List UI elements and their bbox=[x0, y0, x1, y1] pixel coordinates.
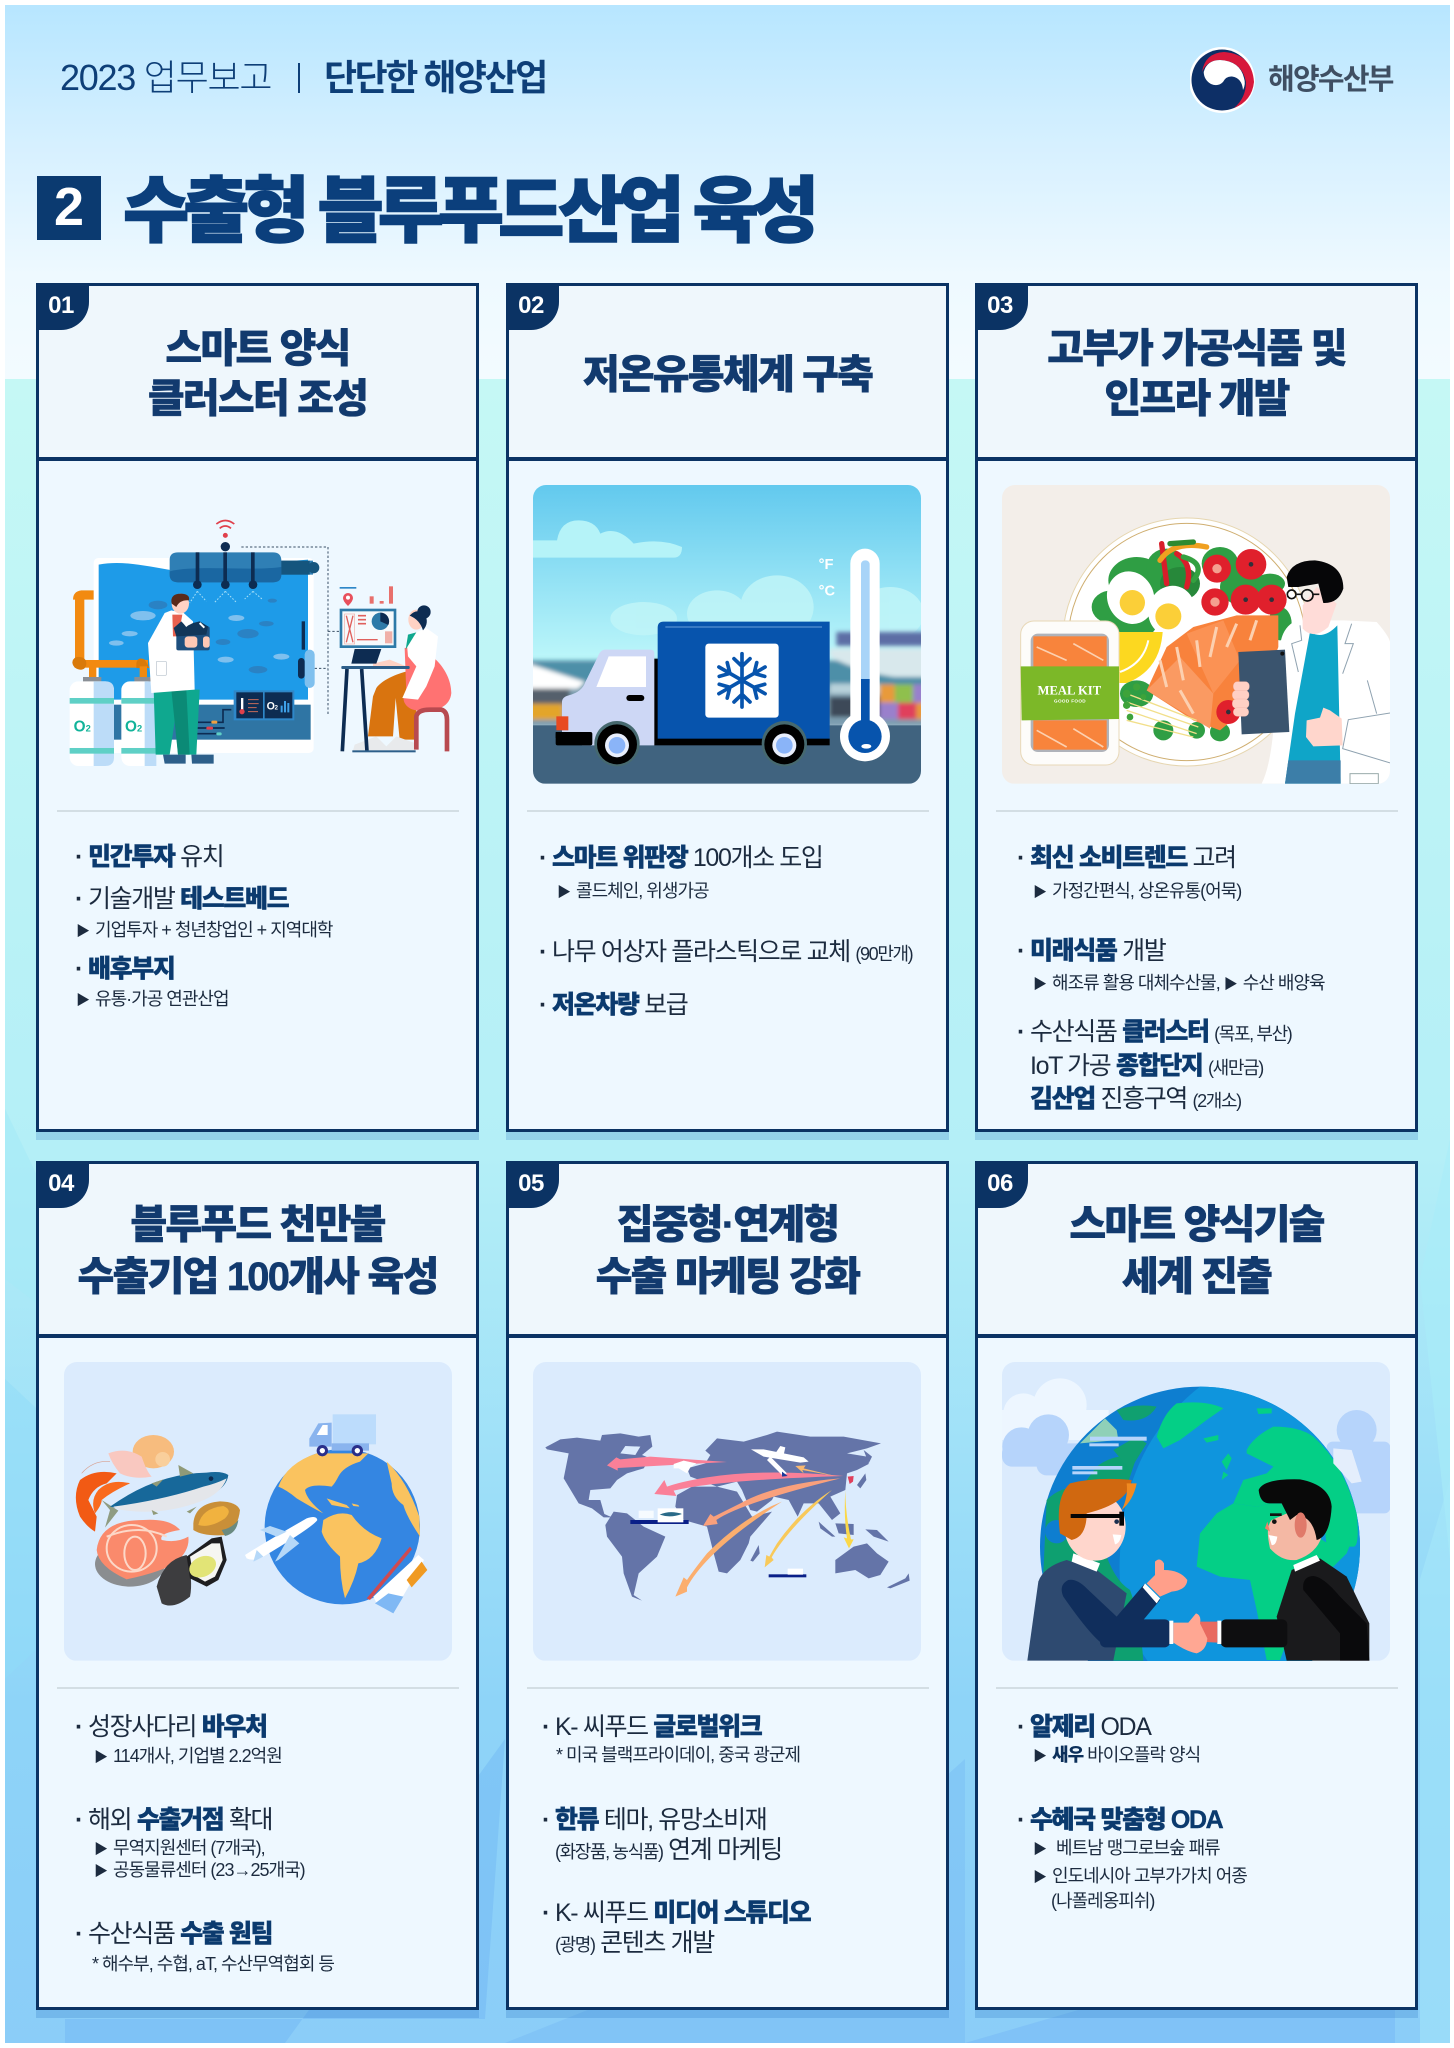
heading 05: 집중형·연계형 bbox=[617, 1203, 838, 1247]
list 04 bbox=[75, 1713, 334, 1974]
list 04: ▶ 무역지원센터 (7개국), bbox=[94, 1838, 265, 1858]
floating charts bbox=[340, 586, 393, 606]
list 05: (광명) 콘텐츠 개발 bbox=[555, 1929, 714, 1957]
heading 06: 스마트 양식기술 bbox=[1069, 1203, 1324, 1247]
heading 01 bbox=[148, 327, 367, 421]
list 05: * 미국 블랙프라이데이, 중국 광군제 bbox=[556, 1745, 800, 1765]
globe bbox=[265, 1449, 420, 1604]
list 02: · bbox=[539, 938, 546, 966]
handshake bbox=[1173, 1613, 1217, 1653]
title number badge bbox=[37, 176, 101, 240]
badge 05 bbox=[506, 1161, 559, 1208]
badge 06 bbox=[975, 1161, 1028, 1208]
meal kit tray: GOOD FOOD bbox=[1054, 698, 1086, 703]
list 05: 한류 테마, 유망소비재 bbox=[555, 1806, 766, 1834]
heading 03 bbox=[1047, 327, 1346, 421]
list 06: · bbox=[1017, 1713, 1024, 1741]
list 06 bbox=[1017, 1713, 1247, 1911]
panel header background bbox=[509, 286, 946, 458]
list 01: 기술개발 테스트베드 bbox=[88, 885, 288, 913]
analyst at desk bbox=[353, 605, 451, 751]
meal kit tray bbox=[1021, 621, 1119, 765]
badge 03 bbox=[975, 283, 1028, 330]
heading 05: 수출 마케팅 강화 bbox=[596, 1255, 859, 1299]
badge 06: 06 bbox=[987, 1170, 1013, 1197]
ships bbox=[630, 1508, 806, 1577]
badge 05: 05 bbox=[518, 1170, 544, 1197]
list 04: · bbox=[75, 1806, 82, 1834]
list 03: ▶ 해조류 활용 대체수산물, ▶ 수산 배양육 bbox=[1033, 973, 1325, 993]
truck bbox=[556, 622, 830, 766]
ministry name: 해양수산부 bbox=[1268, 64, 1393, 96]
title bbox=[37, 172, 814, 252]
panel header background bbox=[978, 1164, 1415, 1335]
oxygen tanks: O2 bbox=[125, 719, 142, 736]
doctor with tablet bbox=[1232, 560, 1390, 784]
list 04: 성장사다리 바우처 bbox=[88, 1713, 267, 1741]
peppers bbox=[1160, 542, 1207, 587]
thermometer: °C bbox=[819, 584, 836, 600]
list 01: · bbox=[75, 955, 82, 983]
list 01: ▶ 유통·가공 연관산업 bbox=[76, 989, 229, 1009]
continents bbox=[545, 1432, 910, 1601]
thermometer: °F bbox=[819, 557, 834, 573]
heading 06: 세계 진출 bbox=[1122, 1255, 1271, 1299]
list 02: · bbox=[539, 991, 546, 1019]
list 02 bbox=[539, 844, 912, 1019]
list 03: IoT 가공 종합단지 (새만금) bbox=[1030, 1052, 1263, 1080]
left man bbox=[1027, 1479, 1187, 1661]
list 05: · bbox=[542, 1806, 549, 1834]
thermometer bbox=[819, 549, 890, 761]
list 02: ▶ 콜드체인, 위생가공 bbox=[557, 881, 709, 901]
list 04: 수산식품 수출 원팀 bbox=[88, 1920, 272, 1948]
list 06: · bbox=[1017, 1806, 1024, 1834]
heading 02: 저온유통체계 구축 bbox=[583, 353, 872, 397]
sprouts bbox=[1127, 694, 1198, 737]
list 05: (화장품, 농식품) 연계 마케팅 bbox=[555, 1836, 782, 1864]
list 03: · bbox=[1017, 844, 1024, 872]
list 05 bbox=[542, 1713, 811, 1957]
list 03: 김산업 진흥구역 (2개소) bbox=[1030, 1085, 1241, 1113]
badge 04: 04 bbox=[48, 1170, 74, 1197]
list 03: 수산식품 클러스터 (목포, 부산) bbox=[1030, 1018, 1291, 1046]
title text: 수출형 블루푸드산업 육성 bbox=[123, 172, 813, 252]
list 03: · bbox=[1017, 937, 1024, 965]
list 04: · bbox=[75, 1920, 82, 1948]
list 06: ▶ 새우 바이오플락 양식 bbox=[1033, 1745, 1200, 1765]
list 04: · bbox=[75, 1713, 82, 1741]
list 06: (나폴레옹피쉬) bbox=[1051, 1891, 1154, 1911]
blurred harbour background bbox=[524, 632, 930, 727]
illustration: refrigerated truck bbox=[533, 485, 921, 784]
list 05: · bbox=[542, 1713, 549, 1741]
panel header background bbox=[978, 286, 1415, 458]
heading 04: 수출기업 100개사 육성 bbox=[78, 1255, 437, 1299]
heading 01: 클러스터 조성 bbox=[148, 377, 367, 421]
illustration: seafood and globe bbox=[64, 1362, 452, 1660]
panel: 04 exporters bbox=[36, 1161, 479, 2010]
list 01: 배후부지 bbox=[88, 955, 175, 983]
panel: 01 smart aquaculture bbox=[36, 283, 479, 1132]
list 03: · bbox=[1017, 1018, 1024, 1046]
icon: wifi signal bbox=[216, 520, 234, 537]
logo: ministry of oceans and fisheries bbox=[1190, 47, 1394, 113]
heading 03: 인프라 개발 bbox=[1104, 377, 1289, 421]
list 06: ▶ 인도네시아 고부가가치 어종 bbox=[1033, 1866, 1247, 1886]
list 03 bbox=[1017, 844, 1325, 1113]
list 01: · bbox=[75, 843, 82, 871]
icon: snowflake bbox=[705, 644, 779, 718]
list 02: 저온차량 보급 bbox=[552, 991, 687, 1019]
header: report label bbox=[60, 57, 546, 98]
oxygen tanks: O2 bbox=[74, 719, 91, 736]
panel header background bbox=[39, 286, 476, 458]
title number badge: 2 bbox=[54, 177, 84, 237]
list 03: 미래식품 개발 bbox=[1030, 937, 1165, 965]
salmon slices bbox=[1147, 615, 1278, 730]
badge 02 bbox=[506, 283, 559, 330]
seafood group bbox=[76, 1435, 240, 1606]
list 04: ▶ 공동물류센터 (23→25개국) bbox=[94, 1860, 305, 1880]
badge 01: 01 bbox=[48, 292, 74, 319]
heading 03: 고부가 가공식품 및 bbox=[1047, 327, 1346, 371]
heading 06 bbox=[1069, 1203, 1324, 1299]
panel: 05 marketing bbox=[506, 1161, 949, 2010]
right man bbox=[1217, 1479, 1369, 1661]
airplane small bbox=[674, 1461, 696, 1473]
cargo ship bbox=[367, 1547, 427, 1613]
sensor readout: O bbox=[267, 701, 275, 713]
illustration: smart fish farm bbox=[70, 520, 452, 766]
monitor bbox=[340, 609, 396, 664]
sensor readout: 2 bbox=[275, 706, 279, 712]
panel header background bbox=[509, 1164, 946, 1335]
list 01: 민간투자 유치 bbox=[88, 843, 223, 871]
scientist with tray bbox=[148, 594, 214, 764]
sensor readout bbox=[234, 690, 294, 720]
badge 03: 03 bbox=[987, 292, 1013, 319]
heading 05 bbox=[596, 1203, 860, 1299]
airplane large bbox=[751, 1446, 809, 1477]
list 05: K- 씨푸드 미디어 스튜디오 bbox=[555, 1899, 810, 1927]
list 02: 스마트 위판장 100개소 도입 bbox=[552, 844, 823, 872]
list 03: 최신 소비트렌드 고려 bbox=[1030, 844, 1236, 872]
heading 01: 스마트 양식 bbox=[165, 327, 350, 371]
airplane bbox=[245, 1517, 317, 1562]
list 06: 수혜국 맞춤형 ODA bbox=[1030, 1806, 1222, 1834]
top gradient band bbox=[5, 5, 1450, 379]
illustration: meal kit and salad plate bbox=[1002, 485, 1390, 784]
panel: 03 high value food bbox=[975, 283, 1418, 1132]
list 04: ▶ 114개사, 기업별 2.2억원 bbox=[94, 1746, 282, 1766]
list 03: ▶ 가정간편식, 상온유통(어묵) bbox=[1033, 881, 1241, 901]
export arrows bbox=[607, 1457, 854, 1597]
list 01: · bbox=[75, 885, 82, 913]
illustration: world map with export arrows bbox=[533, 1362, 921, 1660]
heading 04 bbox=[78, 1203, 437, 1299]
list 02: · bbox=[539, 844, 546, 872]
list 01 bbox=[75, 843, 333, 1009]
meal kit tray: MEAL KIT bbox=[1038, 683, 1102, 697]
list 04: * 해수부, 수협, aT, 수산무역협회 등 bbox=[92, 1954, 334, 1974]
salad leaves bbox=[1092, 547, 1292, 741]
badge 01 bbox=[36, 283, 89, 330]
panel: 02 cold chain bbox=[506, 283, 949, 1132]
list 02: 나무 어상자 플라스틱으로 교체 (90만개) bbox=[552, 938, 912, 966]
eggs bbox=[1100, 565, 1201, 642]
list 01: ▶ 기업투자 + 청년창업인 + 지역대학 bbox=[76, 920, 332, 940]
header: report label: 2023 업무보고 bbox=[60, 57, 271, 98]
pipes bbox=[72, 590, 150, 678]
truck on globe bbox=[309, 1414, 376, 1456]
badge 02: 02 bbox=[518, 292, 544, 319]
list 06: ▶ 베트남 맹그로브숲 패류 bbox=[1033, 1838, 1220, 1858]
desk bbox=[341, 666, 416, 752]
lemon bbox=[1118, 632, 1163, 683]
panel: 06 ODA bbox=[975, 1161, 1418, 2010]
sensor tube bbox=[170, 542, 319, 603]
header: report label: 단단한 해양산업 bbox=[324, 57, 546, 98]
list 06: 알제리 ODA bbox=[1030, 1713, 1151, 1741]
clouds bbox=[1002, 1378, 1109, 1440]
panel header background bbox=[39, 1164, 476, 1335]
heading 04: 블루푸드 천만불 bbox=[130, 1203, 385, 1247]
icon: taegeuk symbol bbox=[1190, 47, 1255, 113]
list 05: K- 씨푸드 글로벌위크 bbox=[555, 1713, 761, 1741]
illustration: handshake in front of globe bbox=[1002, 1362, 1390, 1661]
oxygen tanks bbox=[70, 681, 156, 766]
list 04: 해외 수출거점 확대 bbox=[88, 1806, 272, 1834]
earth bbox=[1040, 1387, 1360, 1707]
list 05: · bbox=[542, 1899, 549, 1927]
badge 04 bbox=[36, 1161, 89, 1208]
tomatoes bbox=[1201, 549, 1287, 724]
